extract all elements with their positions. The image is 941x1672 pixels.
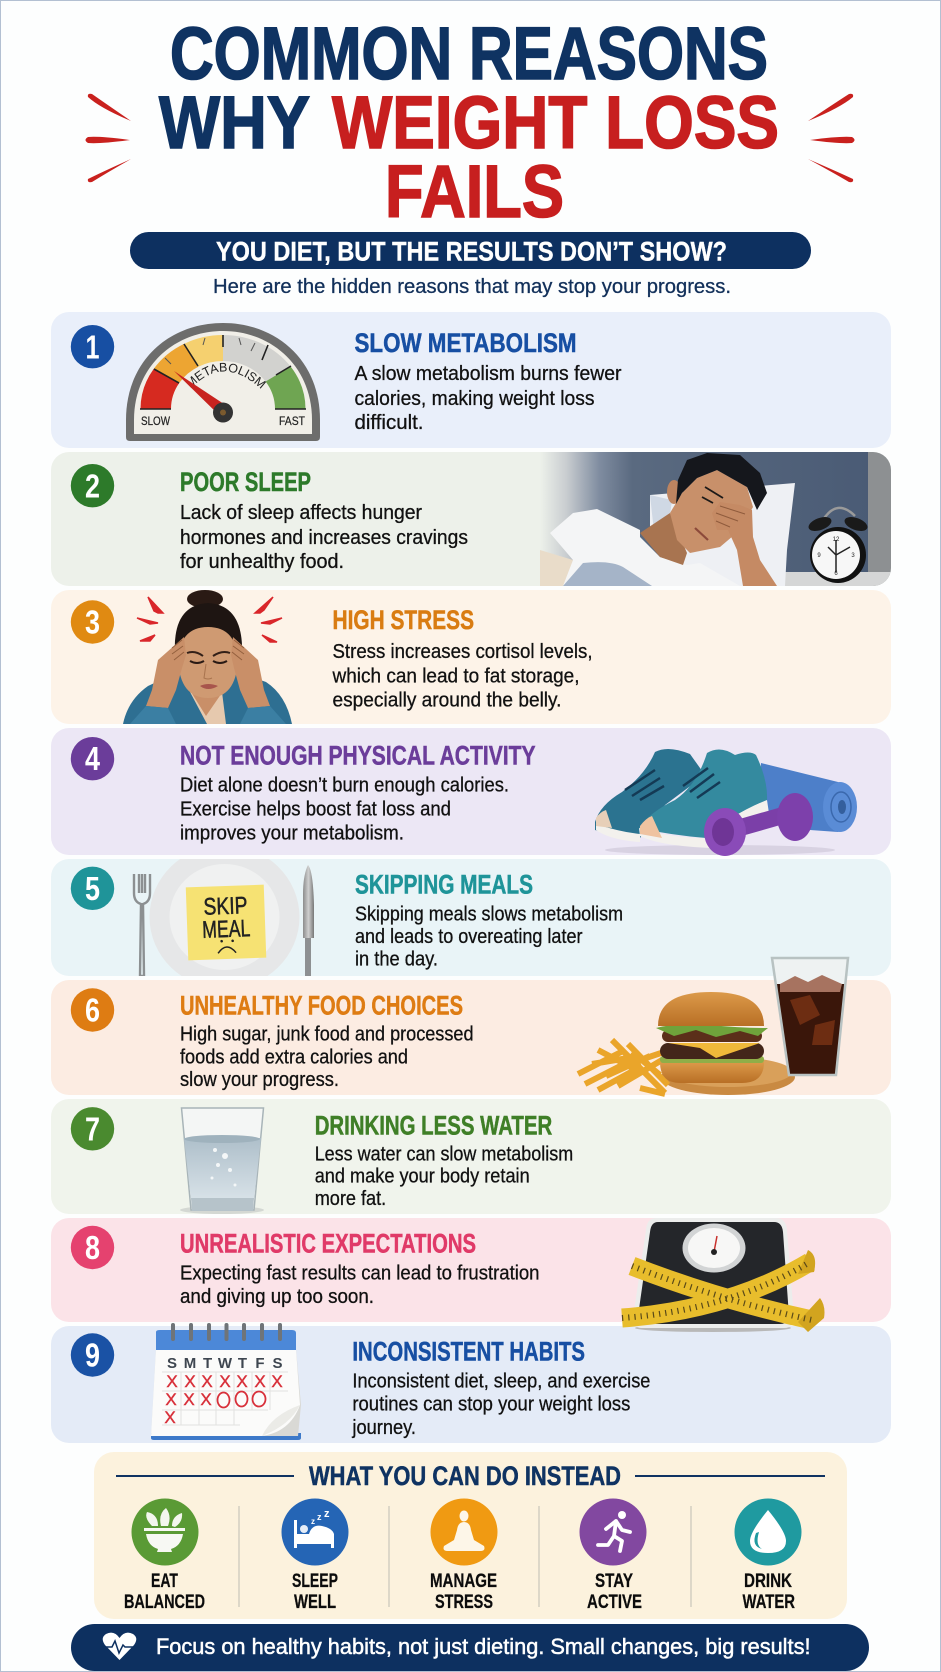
- image: stressed woman: [123, 590, 292, 724]
- heading: SKIPPING MEALS: [355, 870, 533, 900]
- body text: Exercise helps boost fat loss and: [180, 798, 451, 821]
- label: STRESS: [435, 1591, 493, 1613]
- icon: metabolism gauge: METABOLISM: [186, 362, 266, 389]
- body text: [332, 640, 592, 712]
- tip: drink water: [734, 1498, 802, 1613]
- badge 2: 2: [85, 468, 100, 504]
- badge 1: 1: [86, 328, 100, 366]
- body text: [352, 1370, 650, 1439]
- icon: calendar: X: [236, 1372, 248, 1391]
- panel: 3 high stress: [51, 590, 891, 724]
- label: [292, 1570, 338, 1613]
- body text: [354, 362, 622, 434]
- title: [159, 12, 779, 233]
- tip: stay active: [580, 1498, 646, 1613]
- badge 1: [71, 325, 114, 368]
- body text: and leads to overeating later: [355, 925, 583, 948]
- heading: HIGH STRESS: [332, 605, 474, 635]
- panel: 2 poor sleep: [51, 452, 891, 586]
- body text: [180, 501, 468, 573]
- image: plate with skip meal note: MEAL: [202, 915, 251, 944]
- heading: WHAT YOU CAN DO INSTEAD: [309, 1461, 621, 1491]
- tip: manage stress: [430, 1498, 498, 1613]
- image: glass of water: [180, 1108, 264, 1214]
- body text: High sugar, junk food and processed: [180, 1023, 474, 1046]
- icon: calendar: X: [166, 1372, 178, 1391]
- icon: bed with zzz: z: [311, 1517, 315, 1526]
- body text: [180, 1023, 474, 1091]
- intro text: Here are the hidden reasons that may stop your progress.: [213, 276, 731, 298]
- footer banner: [71, 1624, 869, 1671]
- icon: calendar: X: [201, 1372, 213, 1391]
- icon: metabolism gauge: SLOW: [141, 416, 170, 428]
- body text: Inconsistent diet, sleep, and exercise: [352, 1370, 650, 1393]
- tip: eat balanced: [124, 1498, 205, 1613]
- image: man sleeping with alarm clock: 12: [833, 537, 840, 543]
- icon: bed with zzz: [282, 1498, 348, 1566]
- body text: Skipping meals slows metabolism: [355, 902, 623, 925]
- icon: bed with zzz: z: [317, 1512, 322, 1522]
- body text: Less water can slow metabolism: [315, 1142, 573, 1165]
- badge 7: 7: [85, 1110, 100, 1147]
- image: man sleeping with alarm clock: 6: [834, 571, 838, 577]
- badge 8: [71, 1226, 114, 1269]
- tip: sleep well: [282, 1498, 348, 1613]
- body text: slow your progress.: [180, 1068, 339, 1091]
- body text: calories, making weight loss: [354, 387, 594, 410]
- icon: calendar: S: [167, 1355, 177, 1372]
- heading: POOR SLEEP: [180, 467, 311, 497]
- heading: UNHEALTHY FOOD CHOICES: [180, 991, 463, 1021]
- image: plate with skip meal note: [132, 859, 314, 976]
- body text: Stress increases cortisol levels,: [332, 640, 592, 663]
- icon: calendar: T: [203, 1355, 212, 1372]
- icon: metabolism gauge: [126, 323, 320, 441]
- icon: calendar: X: [271, 1372, 283, 1391]
- icon: heart with pulse: [102, 1633, 137, 1660]
- badge 3: [71, 600, 114, 644]
- heading: DRINKING LESS WATER: [315, 1110, 552, 1140]
- icon: calendar: X: [164, 1408, 176, 1427]
- body text: difficult.: [354, 411, 424, 434]
- badge 9: 9: [85, 1336, 100, 1374]
- label: [430, 1570, 497, 1613]
- body text: which can lead to fat storage,: [332, 665, 580, 688]
- body text: [180, 774, 509, 844]
- footer text: Focus on healthy habits, not just dieting. Small changes, big results!: [156, 1634, 810, 1659]
- panel: 5 skipping meals: [51, 859, 891, 976]
- icon: calendar: X: [219, 1372, 231, 1391]
- icon: calendar: [151, 1325, 301, 1440]
- icon: calendar: X: [184, 1372, 196, 1391]
- label: DRINK: [744, 1570, 792, 1592]
- icon: bowl with leaves: [132, 1498, 198, 1566]
- badge 4: 4: [85, 740, 101, 777]
- label: SLEEP: [292, 1570, 338, 1592]
- subtitle pill: [130, 232, 811, 269]
- badge 6: [71, 988, 114, 1032]
- icon: calendar: M: [184, 1355, 196, 1372]
- body text: [355, 902, 623, 971]
- icon: calendar: S: [272, 1355, 283, 1372]
- icon: calendar: F: [255, 1355, 265, 1372]
- badge 9: [71, 1333, 114, 1377]
- image: plate with skip meal note: SKIP: [203, 892, 248, 921]
- body text: in the day.: [355, 948, 438, 971]
- body text: Expecting fast results can lead to frustration: [180, 1261, 540, 1284]
- icon: calendar: X: [165, 1390, 177, 1409]
- panel: 4 physical activity: [51, 728, 891, 856]
- label: [587, 1570, 642, 1613]
- body text: hormones and increases cravings: [180, 526, 468, 549]
- panel: what you can do instead: [94, 1452, 847, 1619]
- label: ACTIVE: [587, 1591, 642, 1613]
- title: FAILS: [385, 150, 564, 233]
- label: WELL: [294, 1591, 336, 1613]
- body text: improves your metabolism.: [180, 821, 404, 844]
- icon: metabolism gauge: FAST: [279, 416, 305, 428]
- body text: and giving up too soon.: [180, 1285, 374, 1308]
- image: shoes, yoga mat and dumbbell: [595, 749, 857, 856]
- icon: calendar: X: [254, 1372, 266, 1391]
- badge 6: 6: [85, 992, 100, 1028]
- badge 5: 5: [85, 870, 100, 907]
- body text: especially around the belly.: [332, 689, 562, 712]
- image: bathroom scale with measuring tape: [622, 1218, 824, 1332]
- body text: [180, 1261, 540, 1308]
- label: [742, 1570, 795, 1613]
- icon: water drop: [734, 1498, 802, 1566]
- body text: routines can stop your weight loss: [352, 1393, 630, 1416]
- body text: more fat.: [315, 1187, 386, 1210]
- panel: 7 drinking less water: [51, 1099, 891, 1214]
- panel: 9 inconsistent habits: [51, 1325, 891, 1443]
- heading: SLOW METABOLISM: [354, 328, 576, 358]
- badge 4: [71, 737, 114, 780]
- badge 3: 3: [85, 604, 100, 640]
- icon: calendar: W: [218, 1355, 233, 1372]
- image: man sleeping with alarm clock: [540, 452, 891, 586]
- body text: journey.: [352, 1416, 416, 1439]
- title: WEIGHT LOSS: [332, 81, 779, 164]
- badge 7: [71, 1107, 114, 1151]
- image: burger, fries and cola: [578, 958, 848, 1095]
- panel: 6 unhealthy food: [51, 958, 891, 1095]
- badge 5: [71, 867, 114, 910]
- icon: left emphasis rays: [86, 94, 131, 182]
- label: EAT: [151, 1570, 178, 1592]
- label: MANAGE: [430, 1570, 497, 1592]
- body text: Diet alone doesn’t burn enough calories.: [180, 774, 509, 797]
- title: COMMON REASONS: [170, 12, 768, 95]
- label: WATER: [742, 1591, 795, 1613]
- heading: INCONSISTENT HABITS: [352, 1337, 585, 1367]
- icon: calendar: X: [183, 1390, 195, 1409]
- label: BALANCED: [124, 1591, 205, 1613]
- badge 2: [71, 464, 114, 507]
- icon: runner: [580, 1498, 646, 1566]
- body text: for unhealthy food.: [180, 550, 344, 573]
- icon: right emphasis rays: [808, 94, 854, 182]
- body text: foods add extra calories and: [180, 1045, 408, 1068]
- body text: [315, 1142, 573, 1210]
- image: man sleeping with alarm clock: 9: [817, 553, 821, 559]
- body text: A slow metabolism burns fewer: [354, 362, 622, 385]
- heading: UNREALISTIC EXPECTATIONS: [180, 1229, 476, 1259]
- icon: calendar: T: [238, 1355, 247, 1372]
- body text: and make your body retain: [315, 1165, 530, 1188]
- body text: Lack of sleep affects hunger: [180, 501, 422, 524]
- label: STAY: [595, 1570, 633, 1592]
- panel: 8 unrealistic expectations: [51, 1218, 891, 1322]
- icon: calendar: X: [200, 1390, 212, 1409]
- icon: meditation: [430, 1498, 498, 1566]
- subtitle pill: YOU DIET, BUT THE RESULTS DON’T SHOW?: [216, 236, 727, 266]
- heading: NOT ENOUGH PHYSICAL ACTIVITY: [180, 740, 536, 770]
- title: WHY: [159, 81, 310, 164]
- icon: bed with zzz: z: [324, 1508, 330, 1520]
- panel: 1 slow metabolism: [51, 312, 891, 448]
- label: [124, 1570, 205, 1613]
- image: man sleeping with alarm clock: 3: [851, 553, 855, 559]
- badge 8: 8: [85, 1229, 100, 1266]
